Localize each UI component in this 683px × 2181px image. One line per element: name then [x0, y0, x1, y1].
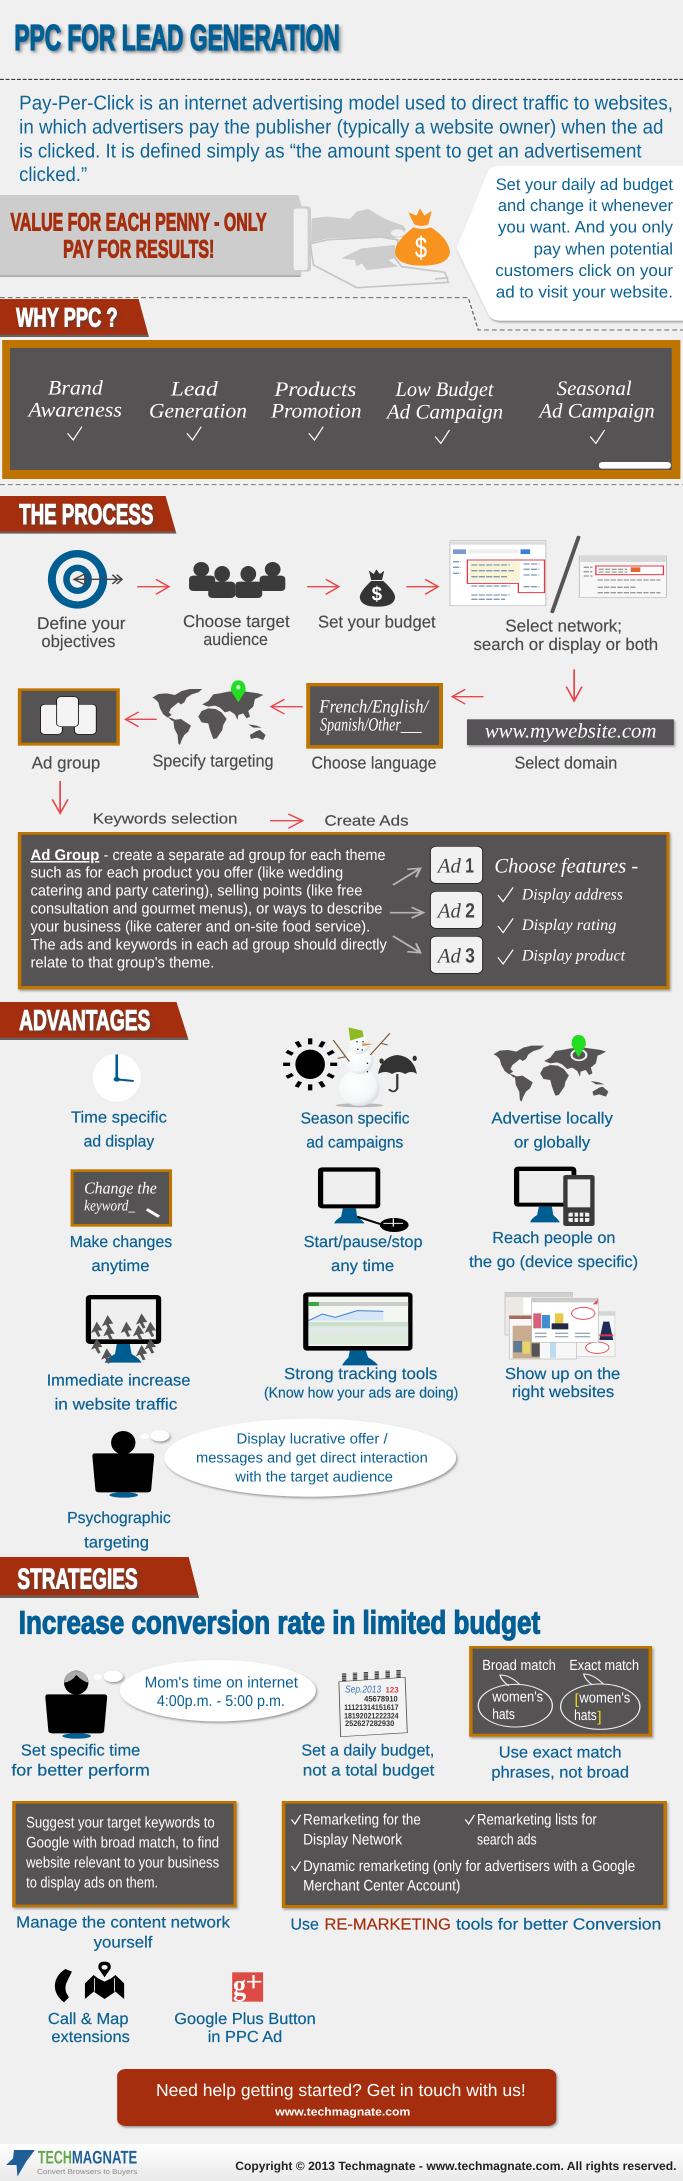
- label: reach people: the go (device specific): [469, 1253, 638, 1271]
- panel: language board: Spanish/Other___: [320, 714, 422, 735]
- icon: clock: [93, 1054, 141, 1102]
- section: intro: PPC FOR LEAD GENERATION: [14, 17, 340, 58]
- label: set specific time: Set specific time: [21, 1742, 140, 1759]
- label: select network: Select network;: [505, 616, 622, 635]
- arrows to ads: [390, 868, 423, 953]
- label: immediate increase: in website traffic: [54, 1396, 177, 1413]
- panel: remarketing board: Merchant Center Account): [303, 1877, 460, 1894]
- cta button: [117, 2069, 556, 2126]
- arrow: [566, 669, 582, 701]
- icon: monitor and phone: [514, 1167, 595, 1226]
- label: strong tracking tools: [264, 1365, 458, 1401]
- item: lead generation: [149, 377, 247, 440]
- ad 3: 3: [465, 944, 475, 967]
- icon: hand with money bag: [292, 206, 450, 288]
- banner: advantages: [0, 1002, 189, 1040]
- label: season specific: [301, 1110, 409, 1151]
- callout: display lucrative offer: Display lucrative offer /: [237, 1430, 388, 1447]
- ad 2: [430, 891, 483, 928]
- icon: google plus: g: [233, 1969, 246, 2002]
- label: start pause stop: Start/pause/stop: [304, 1233, 423, 1251]
- ad group text: The ads and keywords in each ad group should directly: [30, 936, 387, 953]
- callout: display lucrative offer: messages and get direct interaction: [196, 1449, 428, 1466]
- icon: target: [48, 550, 122, 609]
- label: psychographic targeting: Psychographic: [67, 1509, 171, 1527]
- label: google plus button: [174, 2010, 316, 2046]
- features checklist: Display rating: [522, 916, 616, 934]
- label: use re-marketing tools: [291, 1916, 661, 1933]
- banner: value for each penny: [0, 195, 301, 277]
- label: set specific time: for better perform: [11, 1762, 150, 1779]
- label: strong tracking tools: (Know how your ads are doing): [264, 1384, 458, 1401]
- panel: match types board: ]: [597, 1708, 602, 1725]
- ad 2: 2: [465, 899, 475, 922]
- banner: the process: [0, 496, 176, 534]
- item: low budget ad campaign: Low Budget: [395, 378, 494, 401]
- item: brand awareness: [27, 376, 122, 440]
- icon: world map with pin: [152, 680, 266, 745]
- logo: MAGNATE: [72, 2147, 137, 2167]
- panel: match types board: hats: [574, 1707, 597, 1723]
- label: psychographic targeting: [67, 1509, 171, 1551]
- label: choose target audience: [183, 612, 290, 649]
- label: psychographic targeting: targeting: [84, 1533, 149, 1551]
- panel: language board: French/English/: [319, 696, 430, 717]
- label: make changes: Make changes: [70, 1233, 172, 1251]
- icon: snowman: [333, 1027, 390, 1107]
- label: define your objectives: objectives: [41, 632, 115, 651]
- panel: match types board: Broad match: [482, 1657, 556, 1673]
- panel: remarketing board: Display Network: [303, 1830, 402, 1848]
- icon: umbrella: [378, 1055, 417, 1091]
- label: advertise locally: or globally: [514, 1134, 590, 1151]
- item: low budget ad campaign: [385, 378, 503, 443]
- label: season specific: Season specific: [301, 1110, 409, 1127]
- label: advertise locally: [491, 1110, 613, 1151]
- icon: display network screenshot: [579, 556, 666, 597]
- banner: why ppc: WHY PPC ?: [16, 303, 118, 332]
- panel: ad group explanation: [18, 832, 670, 989]
- label: manage content network: Manage the content network: [16, 1914, 230, 1931]
- label: reach people: Reach people on: [492, 1229, 616, 1247]
- icon: phone: [55, 1969, 72, 2002]
- item: low budget ad campaign: Ad Campaign: [385, 400, 503, 423]
- label: show up on right websites: right websites: [512, 1383, 614, 1401]
- panel: remarketing board: search ads: [477, 1830, 537, 1848]
- item: products promotion: [271, 378, 362, 440]
- icon: change keyword board: [71, 1169, 172, 1227]
- item: brand awareness: Awareness: [27, 399, 122, 421]
- label: set a daily budget: Set a daily budget,: [301, 1742, 434, 1759]
- icon: thinking person: [92, 1430, 169, 1498]
- features checklist: Choose features -: [494, 855, 638, 877]
- panel: suggest keywords board: Google with broad match, to find: [26, 1834, 219, 1851]
- label: time specific: [71, 1109, 167, 1150]
- label: set your budget: Set your budget: [318, 612, 436, 631]
- icon: calendar: 45678910: [364, 1694, 398, 1703]
- label: set a daily budget: [301, 1742, 434, 1779]
- label: manage content network: yourself: [94, 1934, 153, 1951]
- panel: match types board: women's: [492, 1689, 543, 1705]
- arrow: [270, 814, 303, 828]
- icon: map pin: [85, 1962, 124, 1999]
- panel: ad group board: [18, 688, 120, 746]
- arrow: [406, 579, 438, 594]
- callout: daily budget: [457, 166, 683, 321]
- arrow: [125, 712, 157, 727]
- label: select network: [473, 616, 658, 654]
- features checklist: [494, 855, 638, 964]
- panel: remarketing board: Remarketing lists for: [477, 1810, 597, 1828]
- label: time specific: ad display: [84, 1133, 154, 1150]
- label: use exact match: phrases, not broad: [491, 1764, 629, 1781]
- item: seasonal ad campaign: [538, 377, 655, 443]
- intro paragraph: [19, 91, 673, 185]
- icon: monitor with cursors: [86, 1295, 161, 1364]
- section: intro: [0, 17, 683, 479]
- label: use re-marketing tools: RE-MARKETING: [325, 1916, 451, 1933]
- icon: sun: [283, 1038, 337, 1090]
- panel: match types board: Exact match: [569, 1657, 639, 1673]
- item: brand awareness: Brand: [48, 376, 103, 399]
- label: reach people: [469, 1229, 638, 1271]
- ad group text: Ad Group: [30, 846, 99, 863]
- callout: display lucrative offer: with the target audience: [235, 1468, 393, 1485]
- cta button: www.techmagnate.com: [275, 2106, 410, 2118]
- item: products promotion: Promotion: [271, 400, 362, 422]
- panel: suggest keywords board: website relevant to your business: [26, 1854, 219, 1871]
- label: choose target audience: Choose target: [183, 612, 290, 631]
- icon: budget bag: [360, 569, 395, 607]
- icon: search network screenshot: [450, 541, 546, 606]
- ad 1: [430, 846, 483, 883]
- label: specify targeting: Specify targeting: [152, 751, 274, 770]
- section: strategies: [0, 1557, 667, 1908]
- callout: mom's time on internet: 4:00p.m. - 5:00 p.m.: [157, 1692, 285, 1709]
- label: select domain: Select domain: [514, 753, 617, 772]
- item: lead generation: Lead: [170, 377, 218, 400]
- label: time specific: Time specific: [71, 1109, 167, 1126]
- label: immediate increase: [47, 1372, 190, 1413]
- item: seasonal ad campaign: Seasonal: [557, 377, 632, 400]
- banner: value for each penny: PAY FOR RESULTS!: [63, 235, 214, 263]
- icon: calendar: 18192021222324: [344, 1712, 399, 1721]
- icon: calendar: 11121314151617: [344, 1703, 399, 1712]
- banner: why ppc: [0, 299, 149, 337]
- label: call and map extensions: Call & Map: [48, 2010, 129, 2028]
- icon: calendar: 123: [386, 1686, 399, 1695]
- panel: match types board: women's: [579, 1690, 630, 1706]
- label: immediate increase: Immediate increase: [47, 1372, 190, 1389]
- section: advantages: [0, 1002, 638, 1275]
- label: call and map extensions: extensions: [51, 2028, 130, 2046]
- label: keywords selection: Keywords selection: [93, 810, 237, 827]
- label: choose target audience: audience: [203, 630, 268, 649]
- label: advertise locally: Advertise locally: [491, 1110, 613, 1127]
- ad 3: [430, 936, 483, 973]
- icon: audience: [189, 562, 285, 598]
- callout: mom's time on internet: [120, 1660, 316, 1721]
- ad group text: - create a separate ad group for each theme: [104, 846, 386, 863]
- icon: budget bag: $: [372, 583, 382, 605]
- divider slash: [552, 537, 578, 612]
- label: set a daily budget: not a total budget: [303, 1762, 434, 1779]
- label: google plus button: in PPC Ad: [208, 2028, 282, 2046]
- banner: the process: THE PROCESS: [19, 498, 153, 530]
- panel: match types board: [469, 1646, 652, 1737]
- arrow: [52, 781, 68, 813]
- banner: strategies: STRATEGIES: [17, 1563, 138, 1595]
- icon: calendar: [339, 1670, 407, 1737]
- icon: world map: [494, 1035, 608, 1102]
- callout: mom's time on internet: Mom's time on internet: [145, 1673, 298, 1691]
- ad group text: [30, 846, 387, 971]
- label: manage content network: [16, 1914, 230, 1951]
- panel: match types board: [: [575, 1691, 579, 1707]
- label: google plus button: Google Plus Button: [174, 2010, 316, 2028]
- logo: [6, 2147, 137, 2177]
- label: start pause stop: [304, 1233, 423, 1275]
- icon: calendar: Sep.2013: [345, 1684, 381, 1695]
- ad 3: Ad: [436, 944, 461, 967]
- features checklist: Display address: [522, 885, 623, 903]
- banner: advantages: ADVANTAGES: [19, 1004, 150, 1036]
- icon: change keyword board: Change the: [84, 1178, 157, 1197]
- label: show up on right websites: [505, 1365, 620, 1401]
- arrow: [307, 579, 339, 594]
- panel: suggest keywords board: to display ads on them.: [26, 1873, 158, 1891]
- ad 1: Ad: [436, 855, 461, 877]
- label: use re-marketing tools: Use: [291, 1916, 319, 1933]
- ad 1: 1: [465, 854, 474, 877]
- icon: calendar: 252627282930: [345, 1719, 394, 1728]
- ad group text: your business (like caterer and on-site food service).: [30, 918, 370, 935]
- panel: suggest keywords board: Suggest your target keywords to: [26, 1814, 215, 1831]
- panel: remarketing board: Remarketing for the: [303, 1810, 421, 1828]
- ad group text: consultation and gourmet menus), or ways to describe: [30, 900, 382, 917]
- banner: value for each penny: VALUE FOR EACH PENNY - ONLY: [10, 208, 267, 236]
- label: set specific time: [11, 1742, 150, 1779]
- icon: website collage: [505, 1292, 615, 1359]
- section: keywords and ad group: [18, 810, 670, 989]
- label: use exact match: Use exact match: [499, 1744, 622, 1761]
- icon: hand with money bag: $: [415, 231, 427, 264]
- label: start pause stop: any time: [331, 1257, 394, 1275]
- panel: suggest keywords board: [12, 1801, 237, 1907]
- label: define your objectives: [37, 614, 125, 651]
- section: footer area: [0, 1914, 683, 2181]
- section: the process: [0, 485, 683, 813]
- logo: Convert Browsers to Buyers: [37, 2167, 137, 2176]
- label: choose language: Choose language: [311, 753, 436, 772]
- panel: remarketing board: [282, 1801, 667, 1908]
- arrow: [137, 579, 169, 594]
- icon: mom with thought: [45, 1671, 123, 1739]
- label: make changes: anytime: [91, 1257, 149, 1275]
- logo: TECH: [38, 2147, 72, 2167]
- ad group text: such as for each product you offer (like wedding: [30, 864, 343, 881]
- icon: monitor with mouse: [318, 1167, 409, 1232]
- item: lead generation: Generation: [149, 399, 247, 422]
- label: strong tracking tools: Strong tracking tools: [284, 1365, 437, 1383]
- ad group text: catering and party catering), selling points (like free: [30, 882, 362, 899]
- icon: monitor with analytics: [303, 1292, 413, 1365]
- label: use exact match: [491, 1744, 629, 1781]
- panel: match types board: hats: [492, 1706, 515, 1722]
- item: products promotion: Products: [274, 378, 356, 401]
- ad group text: relate to that group's theme.: [30, 954, 214, 971]
- arrow: [271, 699, 303, 714]
- intro paragraph: clicked.”: [19, 163, 87, 185]
- icon: google plus: [232, 1969, 263, 2002]
- label: show up on right websites: Show up on the: [505, 1365, 620, 1383]
- cta button: Need help getting started? Get in touch with us!: [156, 2081, 526, 2100]
- label: define your objectives: Define your: [37, 614, 125, 633]
- panel: why ppc chalkboard: [2, 340, 680, 479]
- label: ad group: Ad group: [32, 753, 100, 772]
- label: create ads: Create Ads: [325, 812, 409, 829]
- arrow: [452, 689, 484, 704]
- footer bar: [0, 2144, 683, 2181]
- panel: language board: [306, 683, 443, 749]
- ad 2: Ad: [436, 899, 461, 922]
- callout: display lucrative offer: [164, 1419, 456, 1497]
- label: season specific: ad campaigns: [306, 1134, 403, 1151]
- features checklist: Display product: [522, 947, 626, 964]
- icon: change keyword board: keyword_: [84, 1197, 135, 1214]
- label: make changes: [70, 1233, 172, 1275]
- section: advantages continued: [47, 1292, 620, 1551]
- label: call and map extensions: [48, 2010, 130, 2046]
- banner: strategies: [0, 1557, 199, 1598]
